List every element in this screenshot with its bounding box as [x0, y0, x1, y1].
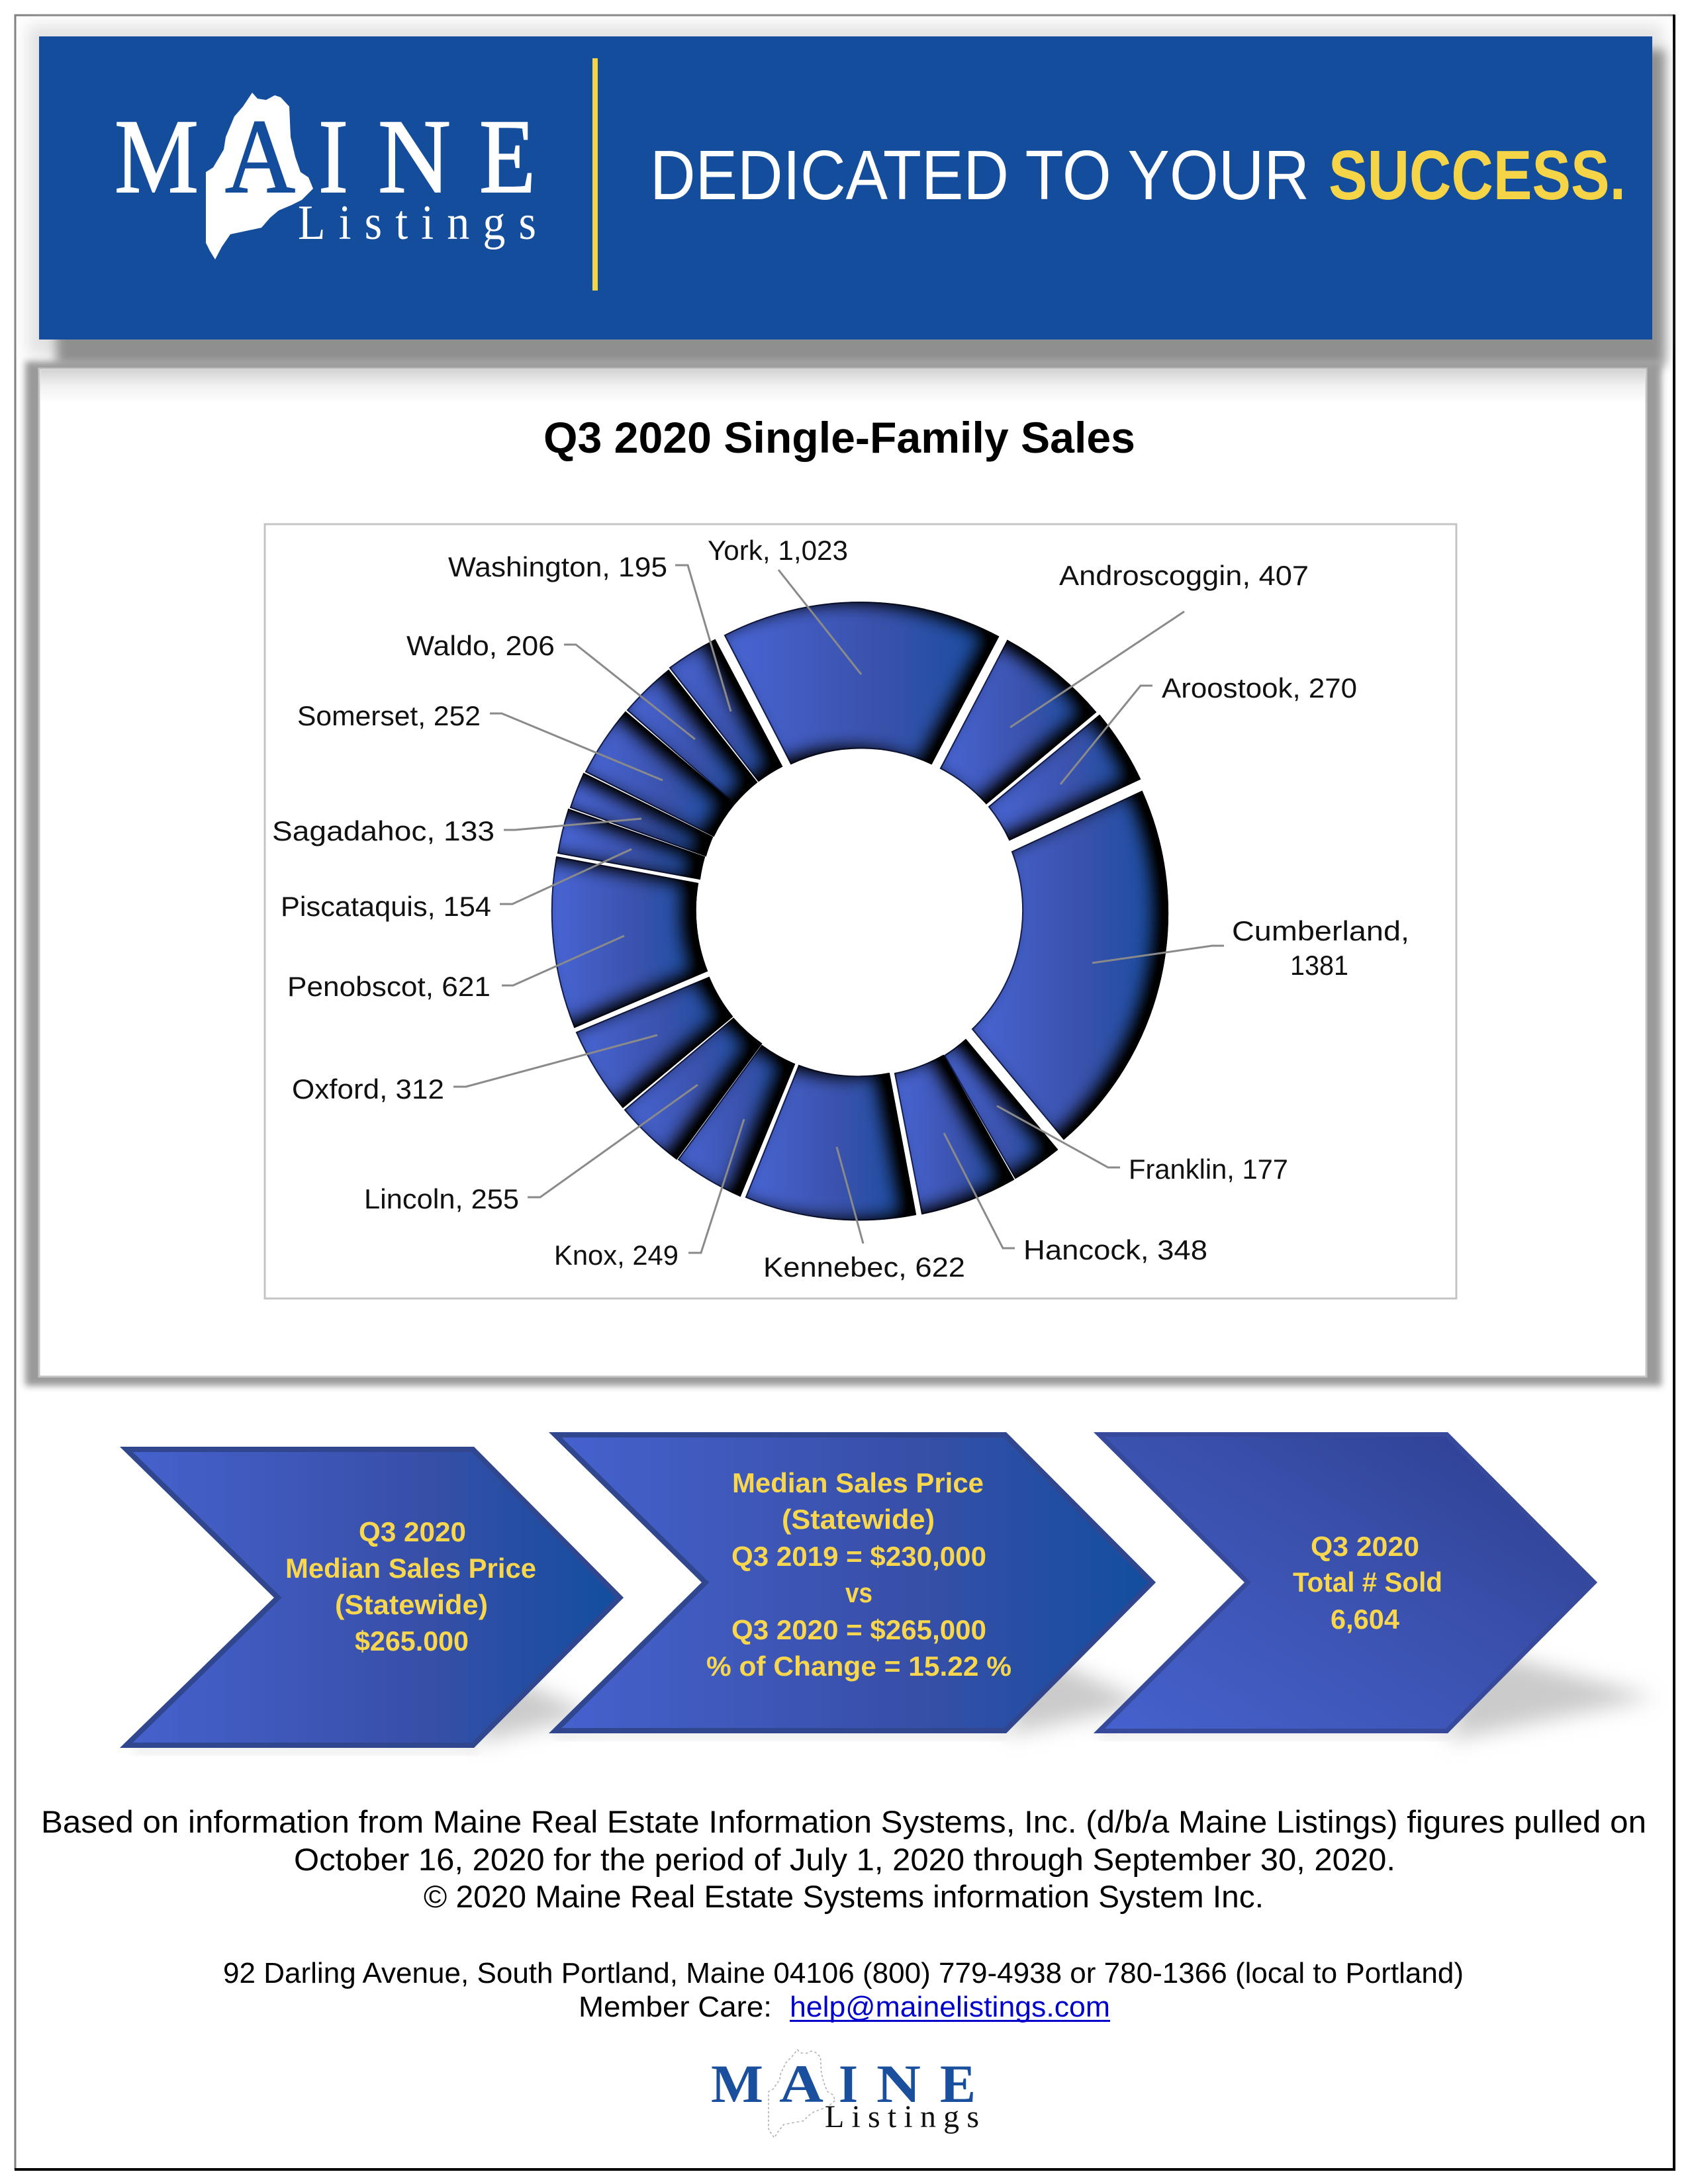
label: York: York, 1,023	[708, 535, 848, 566]
label: Androscoggin: Androscoggin, 407	[1059, 560, 1309, 591]
arrow: total sold: Total # Sold	[1293, 1567, 1442, 1598]
label: Aroostook: Aroostook, 270	[1162, 672, 1357, 704]
arrow: year-over-year comparison: Median Sales Price	[732, 1467, 984, 1498]
label: Aroostook	[1060, 672, 1357, 784]
label: Knox	[554, 1119, 744, 1271]
label: Kennebec: Kennebec, 622	[763, 1251, 965, 1283]
contact details: 92 Darling Avenue, South Portland, Maine 04106 (800) 779-4938 or 780-1366 (local to Portland)	[223, 1957, 1464, 1989]
label: Washington	[448, 551, 731, 711]
arrow: year-over-year comparison: Q3 2020 = $265,000	[731, 1614, 986, 1645]
yellow divider	[592, 58, 598, 291]
label: Hancock	[944, 1133, 1207, 1265]
logo: Maine Listings (footer): E	[940, 2054, 976, 2114]
source note: © 2020 Maine Real Estate Systems information System Inc.	[424, 1879, 1264, 1914]
slice: Somerset	[586, 712, 734, 836]
contact details: help@mainelistings.com	[790, 1991, 1110, 2023]
logo: Maine Listings (footer): Listings	[825, 2099, 979, 2134]
label: Waldo	[406, 630, 695, 739]
slice: York	[725, 602, 998, 764]
arrow: median sales price: Median Sales Price	[285, 1553, 536, 1584]
arrow: year-over-year comparison: vs	[845, 1577, 872, 1608]
heading: Q3 2020 Single-Family Sales	[543, 413, 1135, 462]
label: Cumberland: 1381	[1290, 950, 1348, 981]
slice: Kennebec	[746, 1066, 915, 1220]
contact details: Member Care:	[579, 1991, 772, 2023]
slice: Cumberland	[972, 792, 1168, 1139]
label: Somerset	[297, 700, 663, 780]
slice: Washington	[670, 640, 782, 781]
logo: Maine Listings (white): E	[479, 97, 536, 215]
arrow: median sales price: $265.000	[355, 1625, 469, 1657]
arrow: year-over-year comparison: Q3 2019 = $230,000	[731, 1541, 986, 1572]
label: Androscoggin	[1010, 560, 1309, 727]
label: Hancock: Hancock, 348	[1023, 1234, 1207, 1265]
label: Franklin	[997, 1106, 1288, 1185]
label: Somerset: Somerset, 252	[297, 700, 481, 731]
logo: Maine Listings (white): Listings	[298, 196, 536, 250]
slice: Franklin	[945, 1040, 1057, 1178]
label: Washington: Washington, 195	[448, 551, 667, 582]
label: Lincoln	[364, 1085, 698, 1214]
slice: Waldo	[628, 670, 757, 803]
tagline: SUCCESS.	[1329, 136, 1626, 214]
contact details	[223, 1957, 1464, 2023]
logo: Maine Listings (footer): N	[876, 2054, 921, 2114]
arrow: median sales price	[120, 1447, 624, 1748]
arrow: total sold: 6,604	[1331, 1604, 1400, 1635]
arrow: median sales price: (Statewide)	[335, 1589, 488, 1620]
label: Sagadahoc: Sagadahoc, 133	[272, 815, 494, 846]
slice: Aroostook	[989, 715, 1140, 840]
source note	[41, 1804, 1646, 1914]
arrow: median sales price: Q3 2020	[359, 1516, 466, 1547]
label: Penobscot	[287, 936, 624, 1002]
label: York	[708, 535, 861, 674]
arrow: year-over-year comparison	[549, 1432, 1156, 1733]
slice: Sagadahoc	[571, 774, 712, 856]
label: Penobscot: Penobscot, 621	[287, 971, 491, 1002]
label: Lincoln: Lincoln, 255	[364, 1183, 519, 1214]
slice: Knox	[679, 1046, 794, 1196]
label: Franklin: Franklin, 177	[1129, 1154, 1288, 1185]
slice: Oxford	[577, 978, 732, 1107]
slice: Lincoln	[625, 1019, 761, 1159]
arrow: total sold	[1094, 1432, 1597, 1733]
label: Oxford	[292, 1035, 657, 1105]
label: Cumberland	[1092, 915, 1409, 981]
arrow: total sold: Q3 2020	[1311, 1531, 1419, 1562]
panel: chart card	[25, 361, 1662, 1386]
label: Waldo: Waldo, 206	[406, 630, 555, 661]
label: Oxford: Oxford, 312	[292, 1073, 444, 1105]
arrow: year-over-year comparison: (Statewide)	[782, 1504, 935, 1535]
slice: Hancock	[895, 1056, 1013, 1214]
label: Piscataquis	[281, 849, 632, 922]
donut chart	[552, 602, 1168, 1220]
logo: Maine Listings (footer): A	[779, 2054, 823, 2114]
slice: Penobscot	[552, 857, 707, 1027]
label: Cumberland: Cumberland,	[1232, 915, 1409, 946]
tagline: DEDICATED TO YOUR	[650, 136, 1309, 214]
label: Sagadahoc	[272, 815, 641, 846]
arrow shadows	[132, 1648, 1655, 1755]
logo: Maine Listings (white): A	[225, 97, 295, 215]
logo: Maine Listings (footer)	[711, 2050, 979, 2138]
logo: Maine Listings (white)	[115, 93, 536, 259]
slice: Piscataquis	[558, 809, 704, 879]
source note: Based on information from Maine Real Estate Information Systems, Inc. (d/b/a Maine Listings) figures pulled on	[41, 1804, 1646, 1839]
logo: Maine Listings (footer): I	[839, 2054, 858, 2114]
source note: October 16, 2020 for the period of July 1, 2020 through September 30, 2020.	[294, 1842, 1395, 1877]
logo: Maine Listings (white): M	[115, 97, 199, 215]
logo: Maine Listings (white): I	[318, 97, 348, 215]
header banner	[28, 25, 1665, 366]
label: Piscataquis: Piscataquis, 154	[281, 891, 491, 922]
chart frame	[265, 524, 1456, 1298]
arrow: year-over-year comparison: % of Change = 15.22 %	[706, 1651, 1011, 1682]
label: Knox: Knox, 249	[554, 1240, 679, 1271]
logo: Maine Listings (white): N	[378, 97, 451, 215]
logo: Maine Listings (footer): M	[711, 2054, 763, 2114]
label: Kennebec	[763, 1147, 965, 1283]
slice: Androscoggin	[941, 641, 1096, 803]
